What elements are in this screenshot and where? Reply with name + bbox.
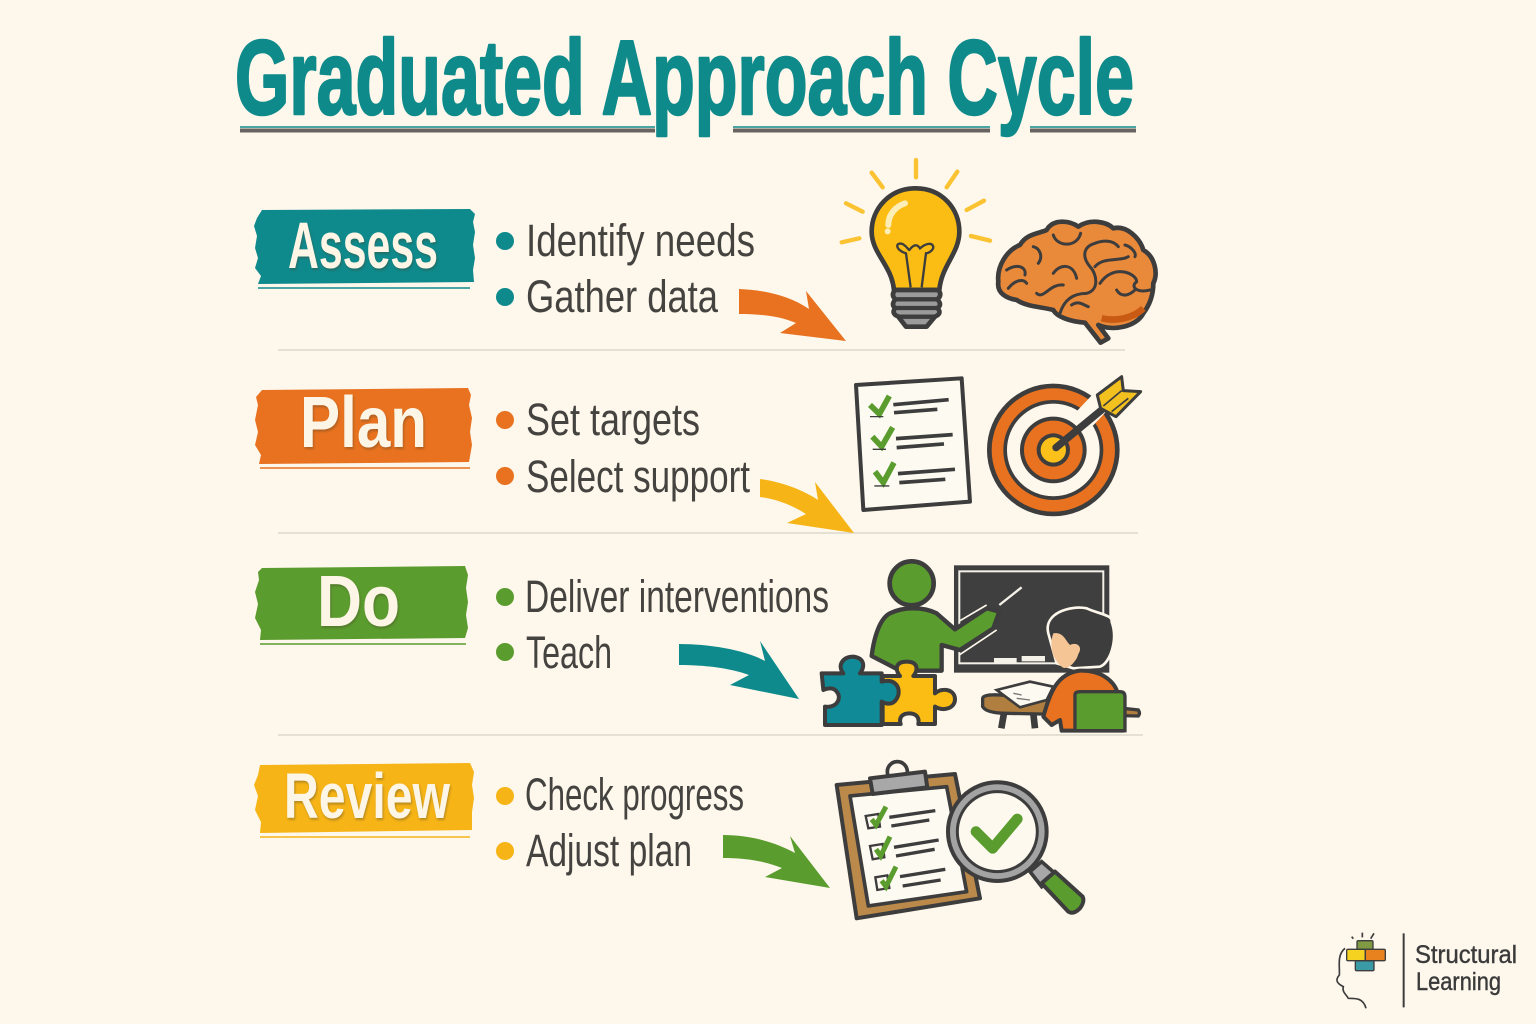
banner: assess <box>254 208 475 288</box>
icon: target <box>987 377 1141 516</box>
bullet list: do: Deliver interventions <box>525 571 829 622</box>
banner: plan <box>255 383 472 468</box>
logo: Structural Learning: Structural <box>1415 941 1517 969</box>
icon: clipboard <box>837 762 980 918</box>
bullet list: assess: Identify needs <box>526 215 755 266</box>
arrow: do <box>679 641 799 699</box>
bullet list: plan <box>496 394 750 502</box>
bullet list: assess: Gather data <box>526 271 719 322</box>
bullet list: plan: Set targets <box>526 394 700 445</box>
panel: plan <box>255 377 1141 533</box>
icon: brain <box>998 222 1156 343</box>
icon: teacher <box>872 561 1022 671</box>
arrow: plan <box>760 479 854 533</box>
bullet list: do <box>496 571 829 678</box>
arrow: review <box>723 835 830 888</box>
banner: do <box>255 562 468 644</box>
bullet list: review: Adjust plan <box>526 825 692 876</box>
bullet list: plan: Select support <box>526 451 750 502</box>
panel: do <box>255 561 1139 731</box>
bullet list: do: Teach <box>526 627 612 678</box>
icon: blackboard <box>954 565 1109 673</box>
panel: assess <box>254 160 1156 343</box>
banner: assess: Assess <box>288 208 438 282</box>
banner: do: Do <box>317 562 400 642</box>
icon: puzzle pieces <box>822 657 955 725</box>
bullet list: review: Check progress <box>525 769 744 820</box>
panel: review <box>254 760 1083 918</box>
bullet list: assess <box>496 215 755 322</box>
logo: Structural Learning <box>1337 933 1517 1008</box>
icon: student at desk <box>983 608 1139 731</box>
bullet list: review <box>496 769 744 876</box>
logo: Structural Learning: Learning <box>1416 968 1501 996</box>
banner: review: Review <box>284 760 450 832</box>
arrow: assess <box>739 289 846 341</box>
icon: checklist <box>856 378 970 510</box>
banner: plan: Plan <box>300 383 427 463</box>
icon: magnifying glass <box>948 782 1083 913</box>
icon: light bulb <box>842 160 990 327</box>
